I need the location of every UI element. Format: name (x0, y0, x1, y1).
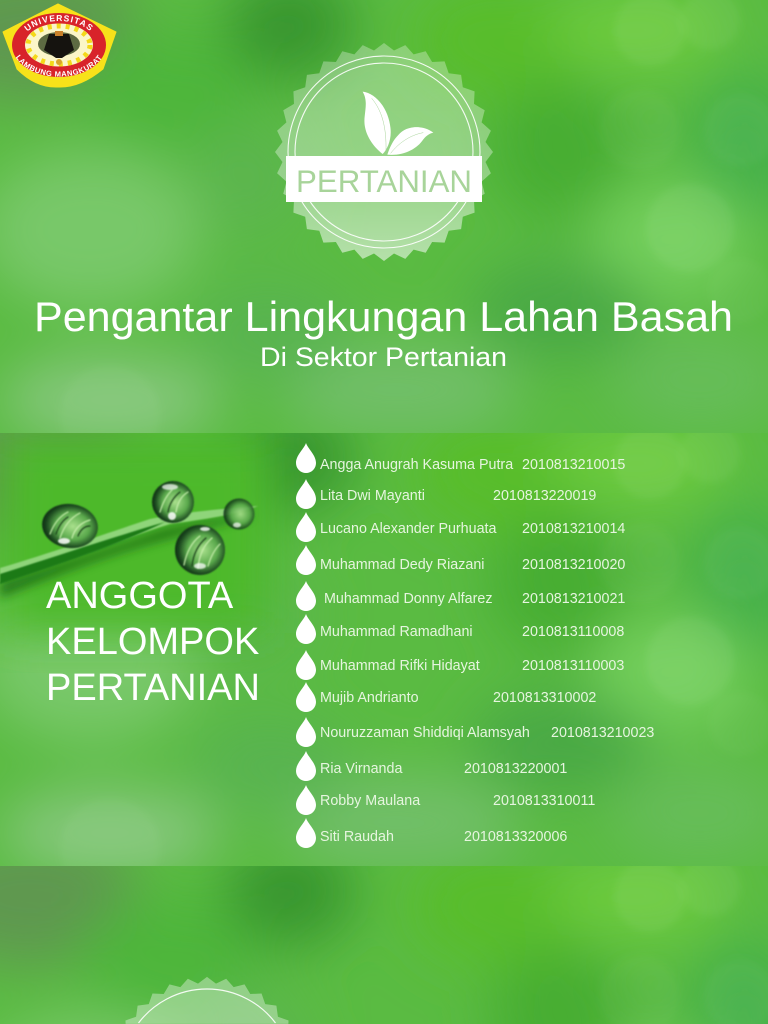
member list: 2010813310002 (493, 690, 596, 706)
title: Pengantar Lingkungan Lahan Basah (34, 293, 733, 340)
member list: 2010813110008 (522, 624, 624, 640)
badge: bottom slide, cropped (125, 977, 289, 1024)
member list: 2010813210023 (551, 725, 654, 741)
heading: group members: ANGGOTA (46, 575, 234, 617)
water drops (39, 481, 254, 575)
member list: Ria Virnanda (320, 761, 402, 777)
heading: group members (46, 575, 260, 709)
logo text: top: UNIVERSITAS (24, 15, 93, 30)
member list: Siti Raudah (320, 829, 394, 845)
member list: Mujib Andrianto (320, 690, 419, 706)
member list: 2010813210020 (522, 557, 625, 573)
photo: water drops on grass blade (0, 433, 270, 633)
slide background: bottom (0, 866, 768, 1024)
member list: Muhammad Donny Alfarez (324, 591, 492, 607)
photo glow (0, 433, 286, 661)
icons: water drop bullets (296, 443, 316, 848)
member list: Muhammad Dedy Riazani (320, 557, 484, 573)
slide background: middle (0, 433, 768, 866)
member list: 2010813110003 (522, 658, 624, 674)
university logo (2, 4, 116, 88)
member list: 2010813310011 (493, 793, 595, 809)
slide background: top (0, 0, 768, 433)
badge label: PERTANIAN (296, 163, 472, 199)
icon: leaves (363, 92, 433, 155)
badge white band (286, 156, 482, 202)
member list: Angga Anugrah Kasuma Putra (320, 457, 513, 473)
member list: 2010813210021 (522, 591, 625, 607)
badge scalloped disc (275, 43, 493, 261)
grass blade (0, 506, 258, 582)
drop reflections (50, 490, 220, 568)
member list: Muhammad Ramadhani (320, 624, 473, 640)
heading: group members: PERTANIAN (46, 667, 260, 709)
member list: 2010813220001 (464, 761, 567, 777)
member list: Lita Dwi Mayanti (320, 488, 425, 504)
member list: Nouruzzaman Shiddiqi Alamsyah (320, 725, 530, 741)
heading: group members: KELOMPOK (46, 621, 259, 663)
member list: Lucano Alexander Purhuata (320, 521, 497, 537)
member list: 2010813320006 (464, 829, 567, 845)
member list: 2010813220019 (493, 488, 596, 504)
member list (320, 457, 654, 845)
member list: 2010813210014 (522, 521, 625, 537)
logo text: bottom: LAMBUNG MANGKURAT (16, 54, 102, 77)
subtitle: Di Sektor Pertanian (260, 342, 507, 372)
grass blade shadow (0, 512, 250, 598)
badge double ring (288, 56, 480, 248)
member list: Robby Maulana (320, 793, 420, 809)
member list: 2010813210015 (522, 457, 625, 473)
member list: Muhammad Rifki Hidayat (320, 658, 480, 674)
badge: PERTANIAN (275, 43, 493, 261)
